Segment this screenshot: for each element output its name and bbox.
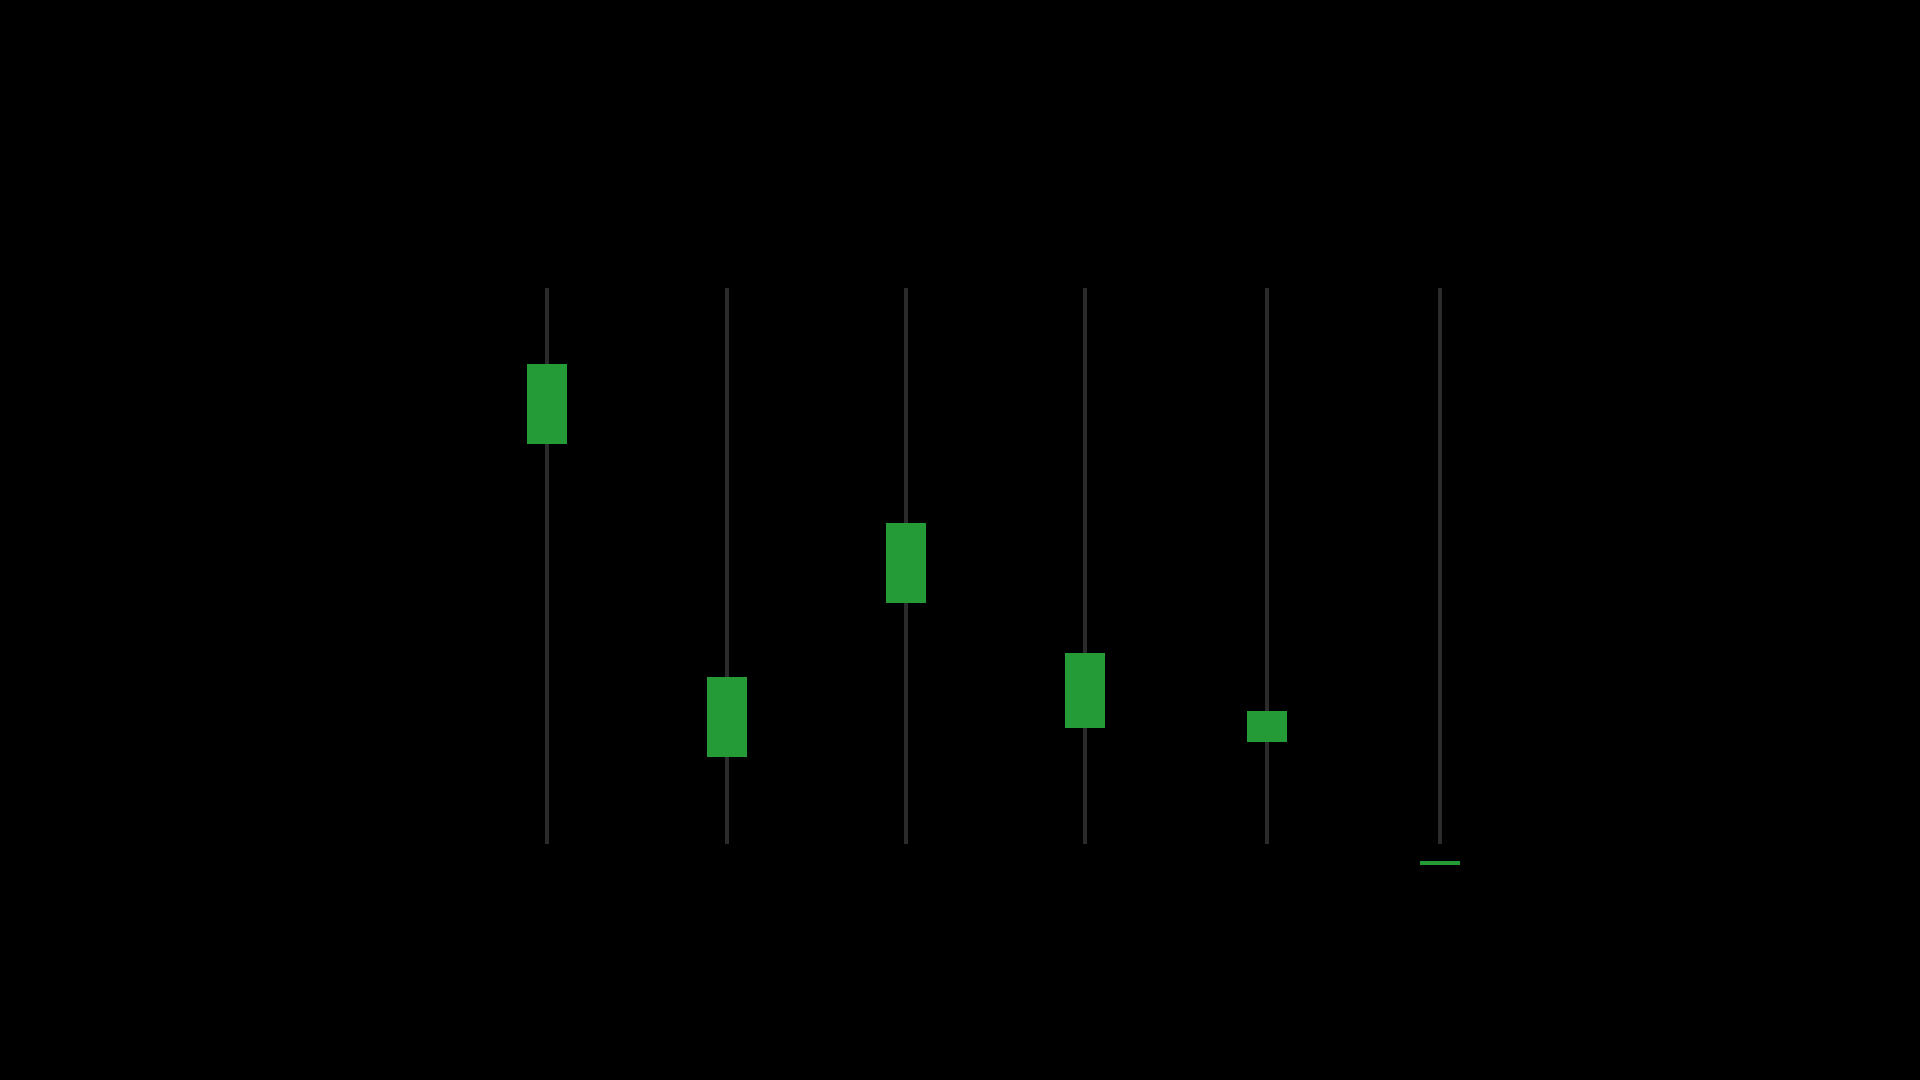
candle 5 [1247,288,1287,844]
candle 3 [886,288,926,844]
candle 6 [1420,288,1460,865]
candle 4 [1065,288,1105,844]
candle 2 [707,288,747,844]
candle 1 [527,288,567,844]
chart: candlestick series [527,288,1460,865]
